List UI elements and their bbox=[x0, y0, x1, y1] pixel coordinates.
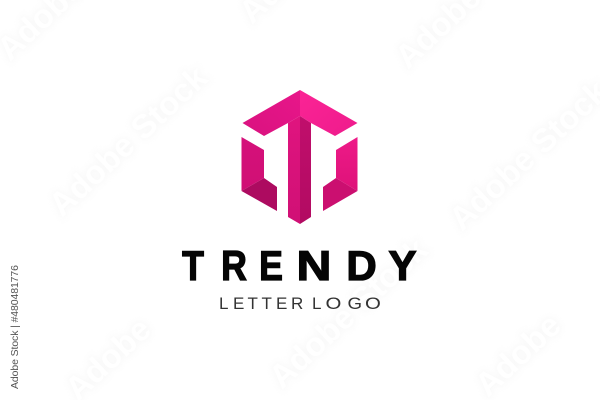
subheading: LETTER LOGO bbox=[219, 294, 381, 313]
subheading: LETTER LOGO: L bbox=[219, 294, 228, 313]
watermark pattern: Adobe Stock bbox=[42, 58, 215, 223]
icon: stem right face bbox=[300, 116, 311, 224]
watermark pattern: Adobe Stock bbox=[262, 230, 435, 395]
side credit: Adobe Stock | #480481776 bbox=[9, 265, 21, 389]
heading: TRENDY: Y bbox=[388, 242, 417, 289]
icon: left wall fold bbox=[242, 178, 277, 211]
watermark pattern: Adobe Stock bbox=[262, 230, 435, 395]
logo icon: hexagon letter T bbox=[242, 90, 358, 224]
subheading: LETTER LOGO: L bbox=[312, 294, 321, 313]
watermark pattern: Adobe Stock bbox=[42, 58, 215, 223]
heading: TRENDY: E bbox=[259, 243, 283, 290]
subheading: LETTER LOGO: O bbox=[365, 294, 381, 313]
icon: right wall fold bbox=[323, 178, 358, 211]
subheading: LETTER LOGO: E bbox=[233, 294, 244, 313]
subheading: LETTER LOGO: O bbox=[326, 294, 341, 313]
heading: TRENDY: N bbox=[297, 242, 331, 289]
heading: TRENDY: R bbox=[221, 243, 247, 290]
subheading: LETTER LOGO: R bbox=[291, 294, 303, 313]
heading: TRENDY bbox=[182, 242, 417, 290]
icon: stem left face bbox=[288, 116, 300, 224]
icon: left wall bbox=[242, 137, 264, 191]
subheading: LETTER LOGO: T bbox=[262, 294, 272, 313]
heading: TRENDY: T bbox=[182, 243, 204, 290]
icon: roof right facet bbox=[300, 90, 358, 136]
heading: TRENDY: D bbox=[346, 242, 377, 289]
icon: roof left facet bbox=[242, 90, 300, 136]
subheading: LETTER LOGO: E bbox=[276, 294, 287, 313]
icon: right wall bbox=[336, 137, 358, 191]
subheading: LETTER LOGO: G bbox=[348, 294, 362, 313]
subheading: LETTER LOGO: T bbox=[248, 294, 258, 313]
